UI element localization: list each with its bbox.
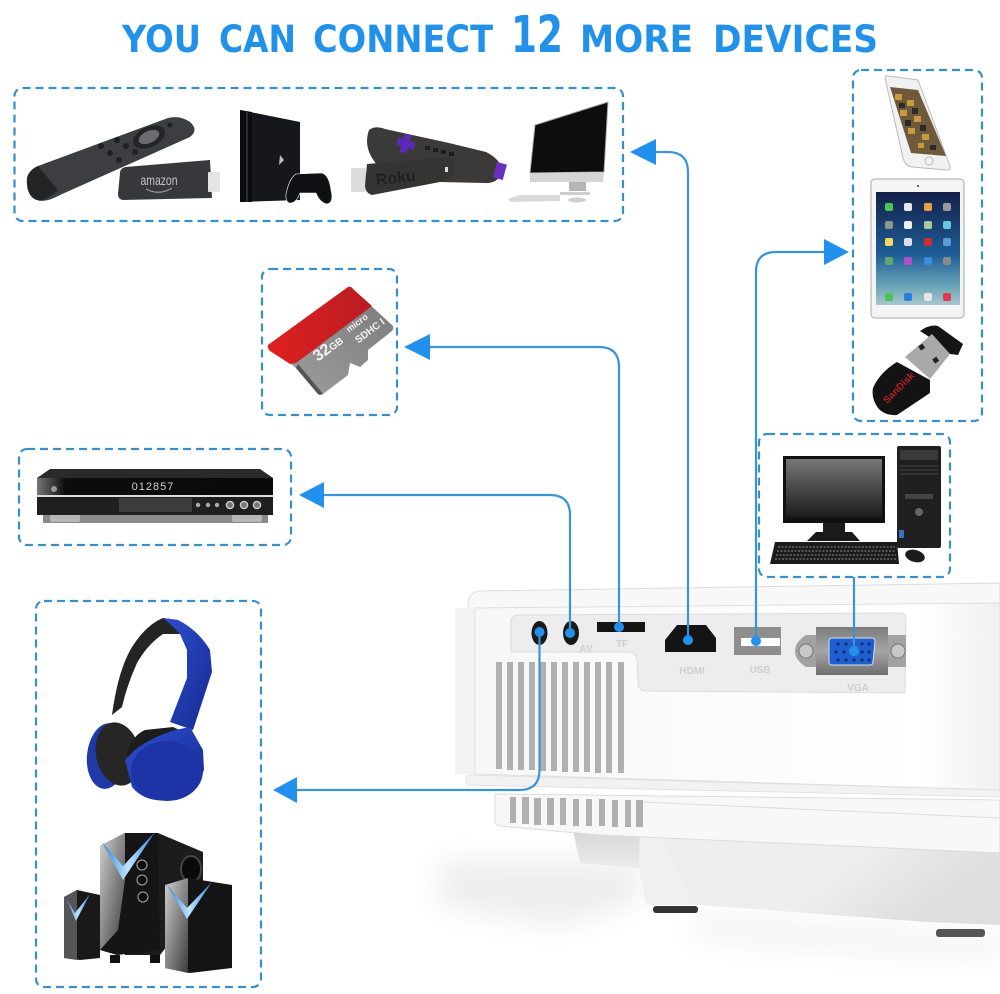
HDMI port xyxy=(665,625,716,652)
audio jack xyxy=(532,621,548,645)
panel: HDMI devices xyxy=(14,88,623,221)
AV jack xyxy=(563,621,579,645)
icon: smartphone xyxy=(885,76,950,170)
icon: micro SD card: micro xyxy=(344,311,370,334)
arrow: HDMI to streaming devices xyxy=(630,139,693,645)
arrow: USB to mobile devices xyxy=(751,239,849,646)
panel: memory card xyxy=(262,269,397,415)
icon: all-in-one computer xyxy=(508,102,608,202)
icon: tablet xyxy=(871,179,964,318)
icon: speakers xyxy=(64,832,232,973)
TF slot xyxy=(597,622,645,632)
title xyxy=(121,6,878,65)
icon: keyboard xyxy=(770,542,899,564)
port labels: HDMI xyxy=(679,666,705,677)
title: CAN xyxy=(219,18,296,61)
icon: streaming stick xyxy=(118,160,220,200)
port panel xyxy=(511,613,906,693)
icon: USB flash drive: SanDisk xyxy=(882,370,918,406)
projector xyxy=(440,583,1000,955)
icon: USB flash drive xyxy=(873,326,963,415)
right foot xyxy=(936,929,985,937)
front foot xyxy=(653,906,698,913)
panel: USB devices xyxy=(853,70,982,421)
icon: micro SD card: 32GB xyxy=(310,332,347,365)
arrow: TF to memory card xyxy=(404,334,624,632)
icon: Roku stick and remote: Roku xyxy=(375,168,417,189)
icon: DVD player: 012857 xyxy=(132,481,174,493)
icon: headphones xyxy=(84,618,212,801)
icon: Roku stick and remote xyxy=(351,127,507,195)
arrow: AV to DVD player xyxy=(299,482,575,638)
title: 12 xyxy=(511,6,563,65)
title: MORE xyxy=(580,18,693,61)
icon: game console xyxy=(240,110,332,204)
icon: micro SD card xyxy=(268,287,393,395)
port labels: TF xyxy=(616,639,628,650)
rear vents xyxy=(496,662,624,773)
port labels: USB xyxy=(749,665,771,676)
icon: game controller xyxy=(286,173,332,204)
icon: micro SD card: SDHC I xyxy=(353,317,387,346)
lower vents xyxy=(510,797,643,827)
icon: streaming stick: amazon xyxy=(140,172,178,188)
arrow: audio to headphones and speakers xyxy=(273,627,544,803)
VGA port xyxy=(795,627,906,675)
title: YOU xyxy=(121,18,201,61)
icon: mouse xyxy=(904,548,926,564)
title: CONNECT xyxy=(313,18,494,61)
title: DEVICES xyxy=(713,18,878,61)
panel: audio devices xyxy=(36,601,261,987)
port labels: AV xyxy=(579,644,593,655)
icon: DVD player xyxy=(37,469,273,523)
port labels xyxy=(579,639,869,694)
connector: VGA to computer xyxy=(849,577,859,656)
icon: computer tower xyxy=(897,446,941,548)
icon: remote control xyxy=(27,117,194,201)
icon: monitor xyxy=(783,456,885,541)
USB port xyxy=(734,627,781,655)
panel: VGA computer xyxy=(759,434,950,577)
port labels: VGA xyxy=(847,683,869,694)
panel: DVD player xyxy=(19,449,291,545)
